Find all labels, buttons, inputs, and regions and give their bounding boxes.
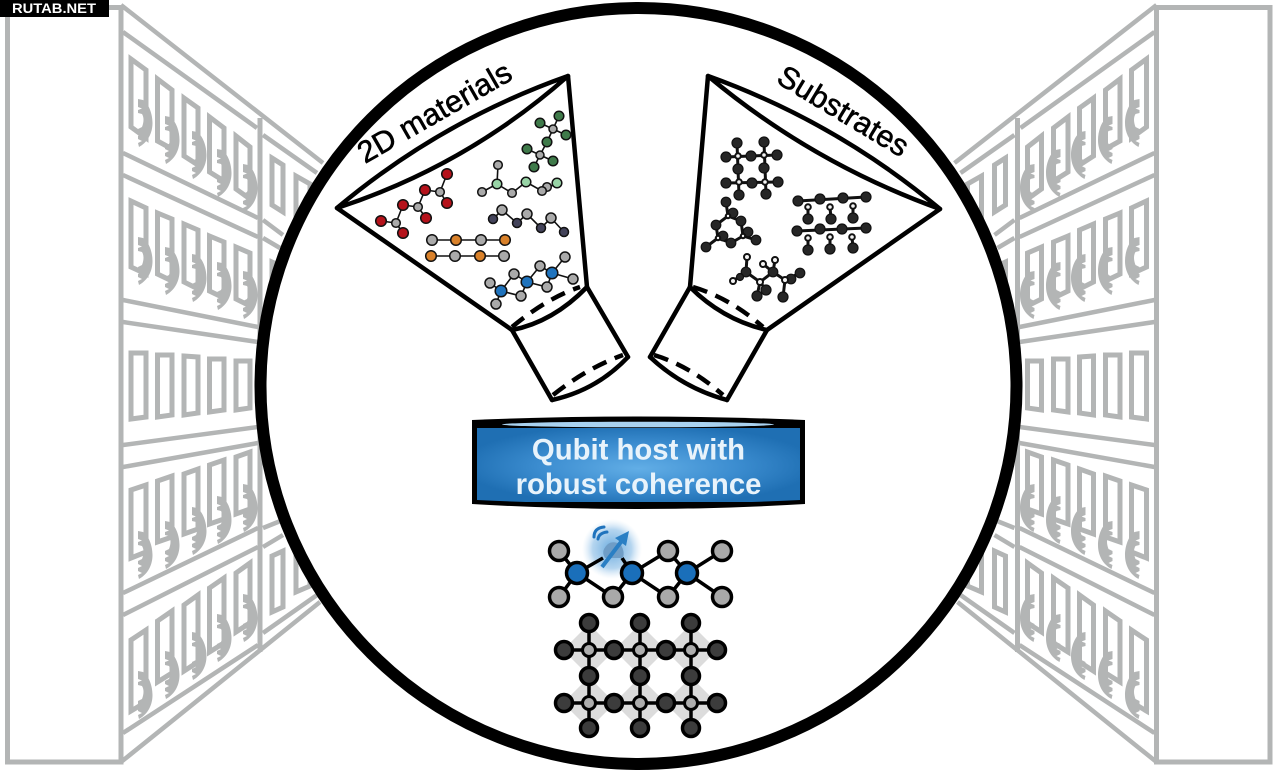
bonds bbox=[564, 623, 717, 728]
funnel outline bbox=[650, 76, 940, 400]
molecule: black ring bbox=[701, 197, 761, 252]
watermark bbox=[0, 0, 109, 17]
grey atoms bbox=[550, 542, 732, 606]
right server rack corridor bbox=[954, 5, 1270, 762]
beaker text: Qubit host with bbox=[532, 434, 745, 466]
beaker text: robust coherence bbox=[516, 468, 761, 501]
blue atoms bbox=[566, 562, 698, 584]
cabinet row 3 bbox=[131, 353, 250, 419]
funnel outline bbox=[337, 76, 628, 400]
left server rack corridor bbox=[8, 5, 323, 762]
rack end panel bbox=[8, 8, 121, 762]
funnel: Substrates bbox=[650, 76, 940, 400]
dark atoms bbox=[556, 614, 726, 736]
label: 2D materials: 2D materials bbox=[352, 55, 518, 170]
cabinet row 1 bbox=[131, 59, 310, 235]
large circle lens bbox=[260, 8, 1016, 764]
molecule: orange chains bbox=[426, 235, 510, 261]
watermark: RUTAB.NET bbox=[12, 1, 97, 16]
spin waves bbox=[594, 527, 607, 539]
spin arrow bbox=[602, 531, 629, 567]
beaker: qubit host bbox=[472, 416, 805, 509]
molecule: black double row bbox=[792, 192, 871, 255]
beaker rim highlight bbox=[502, 422, 774, 427]
qubit spin atom bbox=[603, 542, 624, 558]
label: Substrates: Substrates bbox=[771, 59, 915, 164]
cabinet row 4 bbox=[131, 452, 258, 579]
glow bbox=[582, 519, 642, 579]
beaker text bbox=[516, 434, 761, 501]
rack side frame lines bbox=[121, 5, 323, 762]
molecule: navy chain bbox=[488, 205, 568, 236]
grey diamond shading bbox=[563, 624, 717, 729]
beaker body bbox=[472, 416, 805, 509]
molecule: red bbox=[376, 169, 452, 238]
qubit layer molecule bbox=[550, 519, 732, 606]
cabinet row 2 bbox=[131, 201, 283, 319]
molecule: black grid bbox=[721, 137, 783, 200]
bonds bbox=[559, 551, 722, 597]
molecule: light green bbox=[478, 161, 562, 197]
light atoms bbox=[582, 644, 698, 710]
molecule: blue bbox=[485, 252, 578, 309]
molecule: black chain bbox=[730, 254, 805, 302]
funnel: 2D materials bbox=[337, 76, 628, 400]
molecule: dark green bbox=[522, 111, 571, 172]
cabinet row 5 bbox=[131, 537, 310, 719]
substrate lattice bbox=[556, 614, 726, 736]
